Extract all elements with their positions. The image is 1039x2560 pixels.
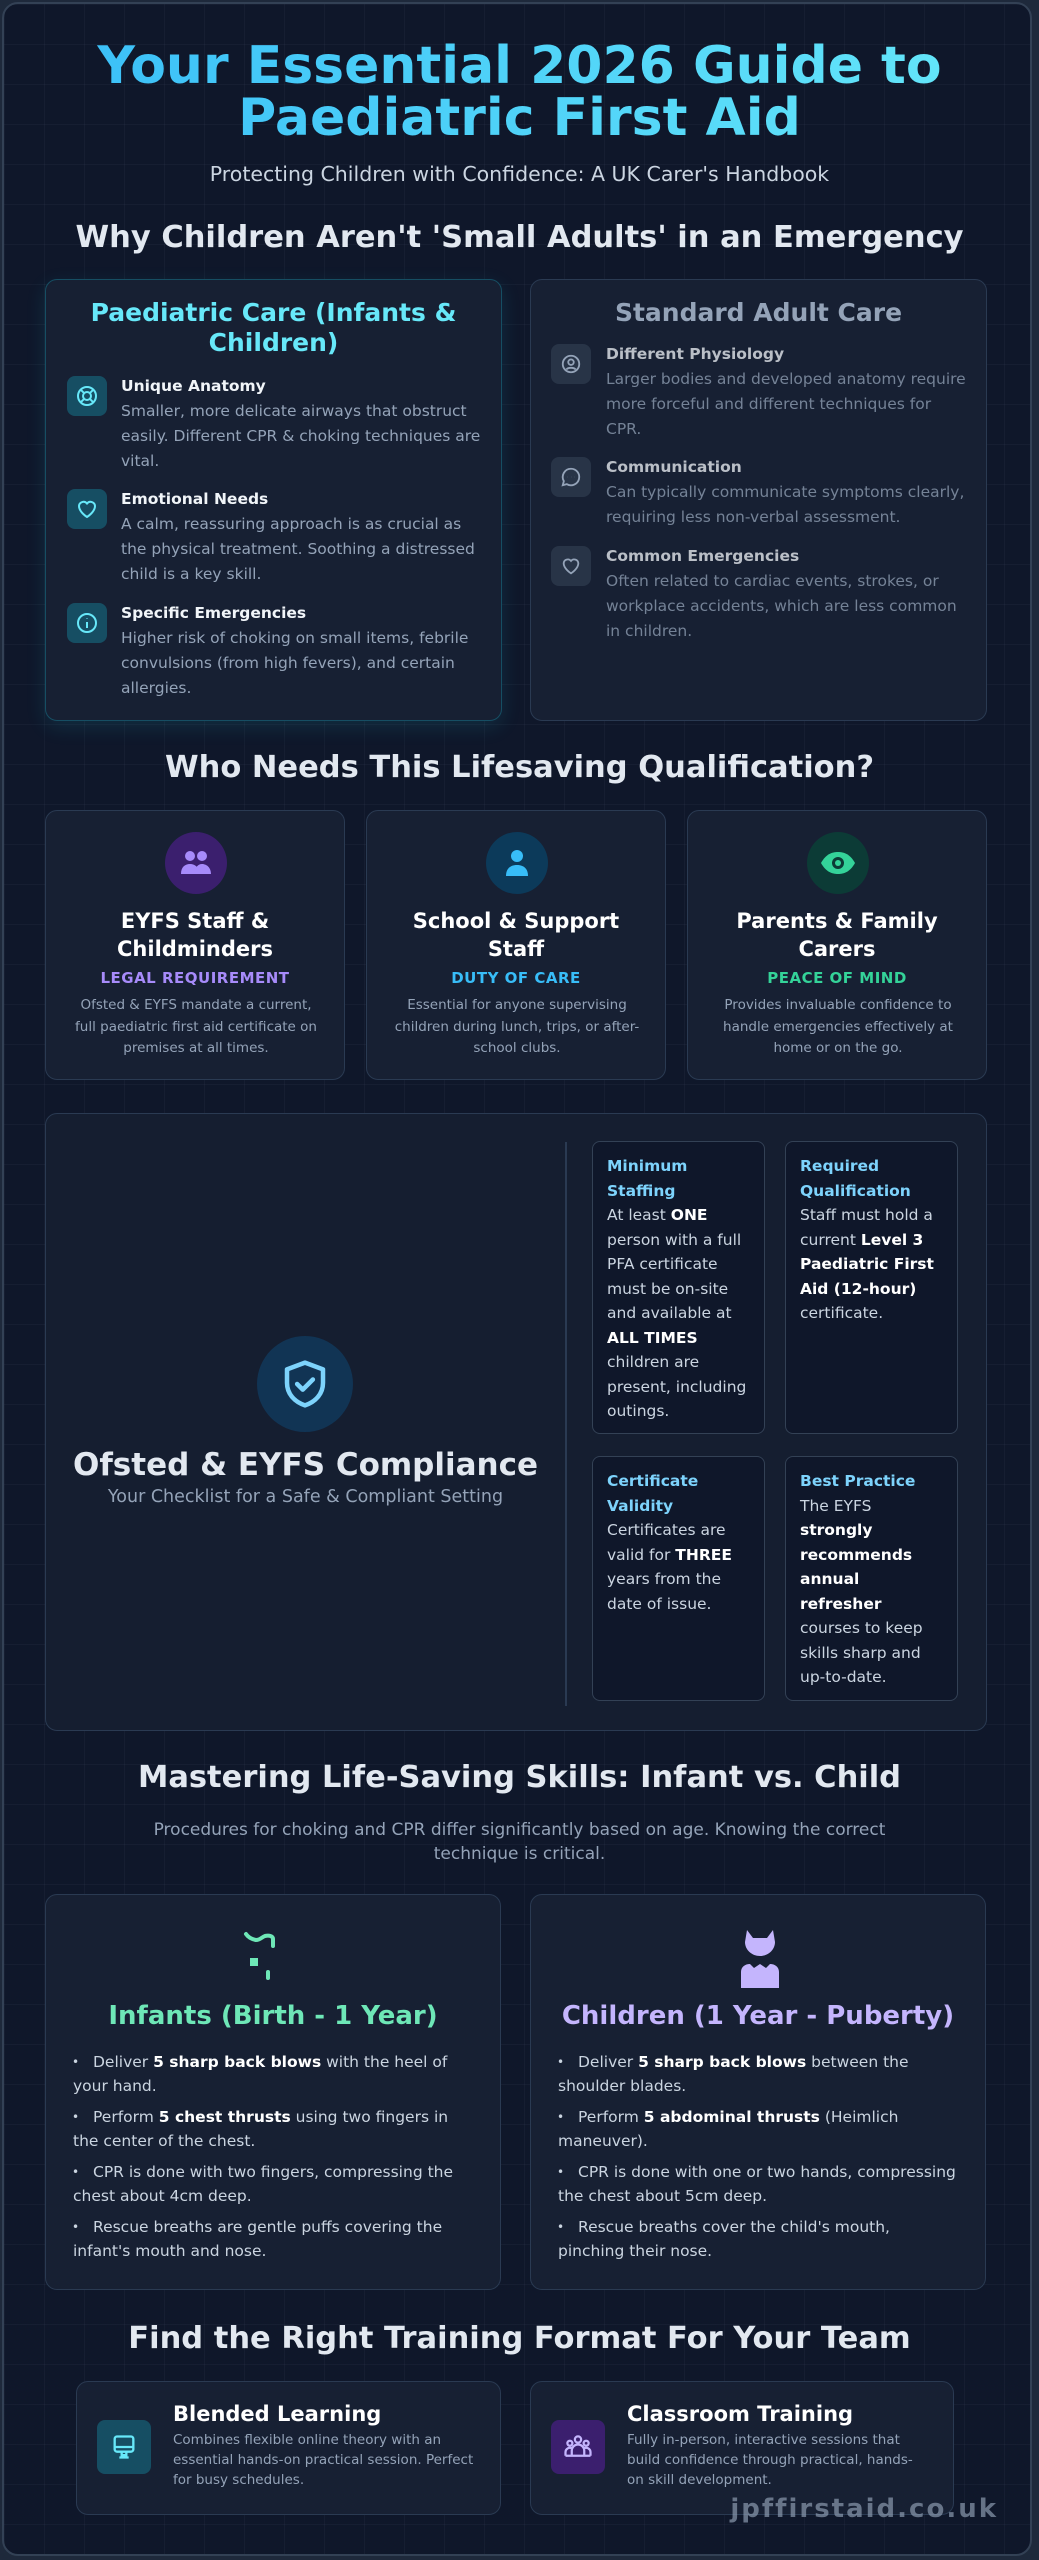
box: certificate validity — [592, 1456, 765, 1701]
text: Ofsted & EYFS mandate a current, full paediatric first aid certificate on premises at all times. — [75, 997, 317, 1056]
icon: heart — [551, 546, 591, 586]
panel title: Children) — [209, 328, 338, 357]
item: common emergencies: Often related to cardiac events, strokes, or workplace accidents, which are less common in children. — [606, 572, 957, 640]
card title: Childminders — [117, 937, 273, 961]
list: child steps: Perform 5 abdominal thrusts (Heimlich maneuver). — [558, 2108, 898, 2150]
list: infant steps: Rescue breaths are gentle puffs covering the infant's mouth and nose. — [73, 2218, 442, 2260]
text: blended: Blended Learning — [173, 2402, 381, 2426]
heading: training format: Find the Right Training Format For Your Team — [128, 2321, 911, 2356]
panel: adult care — [530, 279, 987, 721]
list: child steps: Rescue breaths cover the child's mouth, pinching their nose. — [558, 2218, 890, 2260]
title: Your Essential 2026 Guide to — [97, 36, 942, 96]
watermark: jpffirstaid.co.uk — [730, 2494, 998, 2524]
text: classroom — [627, 2402, 913, 2488]
text: blended — [173, 2402, 473, 2488]
title: Paediatric First Aid — [238, 88, 801, 148]
panel: infants — [45, 1894, 501, 2290]
card: parents — [687, 810, 987, 1080]
item: communication: Communication — [606, 458, 742, 476]
icon: monitor — [97, 2420, 151, 2474]
box: required qualification — [785, 1141, 958, 1434]
tag: DUTY OF CARE — [451, 969, 581, 987]
item: specific emergencies: Specific Emergencies — [121, 604, 306, 622]
item: unique anatomy: Unique Anatomy — [121, 377, 266, 395]
panel title — [91, 298, 456, 357]
tag: PEACE OF MIND — [767, 969, 907, 987]
text: classroom: Fully in-person, interactive sessions that build confidence through practical, hands-on skill development. — [627, 2432, 913, 2488]
icon: chat — [551, 457, 591, 497]
text: Essential for anyone supervising children during lunch, trips, or after-school clubs. — [395, 997, 639, 1056]
panel: children — [530, 1894, 986, 2290]
text: Provides invaluable confidence to handle emergencies effectively at home or on the go. — [723, 997, 953, 1056]
title: children: Children (1 Year - Puberty) — [562, 2001, 954, 2031]
title — [0, 40, 1039, 144]
icon: group — [551, 2420, 605, 2474]
intro text: Procedures for choking and CPR differ significantly based on age. Knowing the correct technique is critical. — [154, 1820, 885, 1864]
heading: mastering: Mastering Life-Saving Skills: Infant vs. Child — [138, 1760, 901, 1795]
box: best practice: Best Practice — [800, 1472, 915, 1490]
item: communication — [606, 458, 964, 526]
icon: eye — [807, 832, 869, 894]
box: certificate validity: Certificates are valid for THREE years from the date of issue. — [607, 1521, 732, 1612]
icon: people — [165, 832, 227, 894]
list: child steps: CPR is done with one or two hands, compressing the chest about 5cm deep. — [558, 2163, 956, 2205]
icon: baby — [244, 1932, 275, 1980]
tag: LEGAL REQUIREMENT — [100, 969, 290, 987]
card: EYFS staff — [45, 810, 345, 1080]
card: blended learning — [76, 2381, 501, 2515]
card title — [736, 909, 938, 961]
item: physiology: Different Physiology — [606, 345, 784, 363]
icon: shield — [257, 1336, 353, 1432]
list: child steps: Deliver 5 sharp back blows between the shoulder blades. — [558, 2053, 909, 2095]
card title — [413, 909, 619, 961]
item: physiology: Larger bodies and developed anatomy require more forceful and different techniques for CPR. — [606, 370, 966, 438]
box: required qualification: Required Qualification — [800, 1157, 911, 1200]
box: best practice — [785, 1456, 958, 1701]
list: infant steps — [73, 2053, 453, 2260]
item: communication: Can typically communicate symptoms clearly, requiring less non-verbal assessment. — [606, 483, 964, 526]
icon: info — [67, 603, 107, 643]
panel: compliance — [45, 1113, 987, 1731]
box: minimum staffing — [592, 1141, 765, 1434]
icon: person — [486, 832, 548, 894]
icon: lifebuoy — [67, 376, 107, 416]
heading: why children: Why Children Aren't 'Small Adults' in an Emergency — [75, 220, 964, 255]
icon: child — [741, 1930, 779, 1988]
item: unique anatomy: Smaller, more delicate airways that obstruct easily. Different CPR & choking techniques are vital. — [121, 402, 480, 470]
panel: paediatric care — [45, 279, 502, 721]
compliance title: Ofsted & EYFS Compliance — [73, 1447, 538, 1483]
card title: School & Support — [413, 909, 619, 933]
box: best practice: The EYFS strongly recommends annual refresher courses to keep skills sharp and up-to-date. — [800, 1496, 923, 1686]
item: common emergencies: Common Emergencies — [606, 547, 799, 565]
panel title: Paediatric Care (Infants & — [91, 298, 456, 327]
item: specific emergencies: Higher risk of choking on small items, febrile convulsions (from high fevers), and certain allergies. — [121, 629, 468, 697]
title: infants: Infants (Birth - 1 Year) — [108, 2001, 438, 2031]
box: minimum staffing: At least ONE person with a full PFA certificate must be on-site and available at ALL TIMES children are present, including outings. — [607, 1206, 746, 1420]
card: school staff — [366, 810, 666, 1080]
list: infant steps: Perform 5 chest thrusts using two fingers in the center of the chest. — [73, 2108, 448, 2150]
box: certificate validity: Certificate Validity — [607, 1472, 698, 1514]
compliance subtitle: Your Checklist for a Safe & Compliant Setting — [108, 1487, 503, 1507]
card: classroom training — [530, 2381, 954, 2515]
list: child steps — [558, 2053, 956, 2260]
list: infant steps: CPR is done with two fingers, compressing the chest about 4cm deep. — [73, 2163, 453, 2205]
icon: heart — [67, 489, 107, 529]
card title: Parents & Family — [736, 909, 938, 933]
text: classroom: Classroom Training — [627, 2402, 853, 2426]
item: emotional needs: A calm, reassuring approach is as crucial as the physical treatment. Soothing a distressed child is a key skill. — [121, 515, 475, 583]
box: required qualification: Staff must hold a current Level 3 Paediatric First Aid (12-hour) certificate. — [800, 1206, 934, 1322]
box: minimum staffing: Minimum Staffing — [607, 1157, 687, 1200]
item: emotional needs: Emotional Needs — [121, 490, 268, 508]
panel title: Standard Adult Care — [615, 298, 902, 327]
icon: person — [551, 344, 591, 384]
heading: who needs: Who Needs This Lifesaving Qualification? — [165, 750, 874, 785]
card title — [117, 909, 273, 961]
card title: Carers — [798, 937, 876, 961]
card title: Staff — [488, 937, 544, 961]
card title: EYFS Staff & — [121, 909, 269, 933]
text: blended: Combines flexible online theory with an essential hands-on practical session. Perfect for busy schedules. — [173, 2432, 473, 2488]
list: infant steps: Deliver 5 sharp back blows with the heel of your hand. — [73, 2053, 447, 2095]
subtitle: Protecting Children with Confidence: A UK Carer's Handbook — [210, 162, 829, 186]
